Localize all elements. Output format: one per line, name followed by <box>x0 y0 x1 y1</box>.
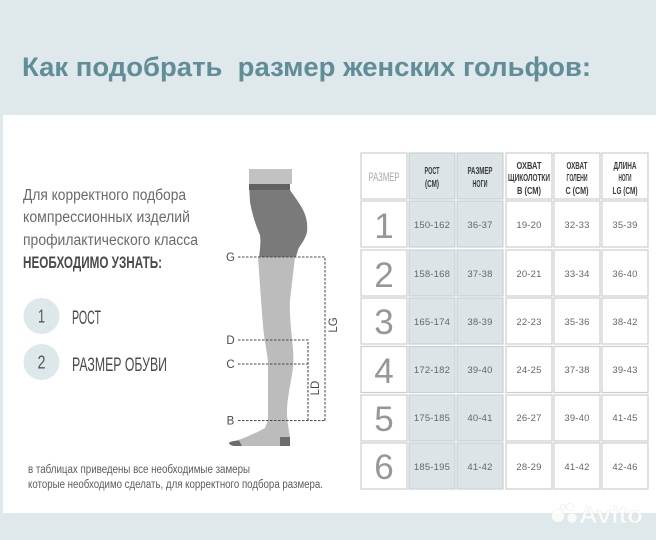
waist band dark stripe <box>249 184 290 190</box>
row: size 4 <box>361 346 648 392</box>
row: size 4: 39-43 <box>612 365 638 376</box>
row: size 1: 35-39 <box>612 220 638 231</box>
header row: (СМ) <box>425 179 439 190</box>
row: size 4: 4 <box>374 352 394 391</box>
list item: height: 1 <box>38 306 45 326</box>
leg diagram <box>226 169 340 446</box>
row: size 2 <box>361 250 648 296</box>
header row: ДЛИНА <box>614 161 636 172</box>
row: size 6: 42-46 <box>612 462 638 473</box>
header row: C (СМ) <box>566 186 588 197</box>
row: size 6: 185-195 <box>414 462 450 473</box>
intro text block: НЕОБХОДИМО УЗНАТЬ: <box>23 253 162 272</box>
measure lines <box>238 257 325 420</box>
row: size 5: 40-41 <box>467 413 493 424</box>
list item: height <box>24 298 101 334</box>
header row: B (СМ) <box>517 186 541 197</box>
heel <box>280 437 290 446</box>
toe <box>229 440 242 446</box>
row: size 1 <box>361 201 648 247</box>
header row <box>361 153 648 199</box>
row: size 2: 20-21 <box>516 269 542 280</box>
header row: НОГИ <box>472 179 488 190</box>
row: size 5: 175-185 <box>414 413 450 424</box>
row: size 6: 41-42 <box>564 462 590 473</box>
labels: G <box>226 252 235 264</box>
footnote <box>28 464 323 491</box>
row: size 3: 38-42 <box>612 317 638 328</box>
row: size 6: 28-29 <box>516 462 542 473</box>
row: size 5: 41-45 <box>612 413 638 424</box>
row: size 2: 37-38 <box>467 269 493 280</box>
header row: РОСТ <box>424 166 440 177</box>
header row: ОХВАТ <box>516 161 542 172</box>
row: size 1: 1 <box>374 207 394 246</box>
row: size 4: 37-38 <box>564 365 590 376</box>
title: Как подобрать размер женских гольфов: <box>22 52 591 82</box>
footnote: которые необходимо сделать, для корректного подбора размера. <box>28 479 323 491</box>
header row: РАЗМЕР <box>468 166 493 177</box>
list item: shoe size <box>24 344 167 380</box>
row: size 5: 26-27 <box>516 413 542 424</box>
row: size 3: 22-23 <box>516 317 542 328</box>
intro text block <box>23 187 198 272</box>
row: size 3 <box>361 298 648 344</box>
intro text block: компрессионных изделий <box>23 209 190 226</box>
row: size 6 <box>361 443 648 489</box>
stocking waistband <box>249 169 292 184</box>
labels <box>226 252 340 428</box>
list item: height: РОСТ <box>72 308 101 329</box>
row: size 4: 39-40 <box>467 365 493 376</box>
row: size 5: 5 <box>374 400 394 439</box>
panel: white content area <box>3 115 656 513</box>
size table <box>361 153 648 489</box>
header row: РАЗМЕР <box>368 170 400 184</box>
header row: ГОЛЕНИ <box>566 173 588 184</box>
row: size 3: 38-39 <box>467 317 493 328</box>
row: size 2: 158-168 <box>414 269 450 280</box>
labels: C <box>226 359 235 371</box>
list item: shoe size: 2 <box>38 352 46 372</box>
row: size 1: 32-33 <box>564 220 590 231</box>
list item: shoe size: РАЗМЕР ОБУВИ <box>72 355 167 376</box>
row: size 5 <box>361 395 648 441</box>
row: size 1: 19-20 <box>516 220 542 231</box>
labels: LD <box>310 381 322 395</box>
row: size 2: 36-40 <box>612 269 638 280</box>
labels: B <box>227 416 235 428</box>
header row: ЩИКОЛОТКИ <box>508 173 550 184</box>
intro text block: Для корректного подбора <box>23 187 186 204</box>
row: size 5: 39-40 <box>564 413 590 424</box>
intro text block: профилактического класса <box>23 232 198 249</box>
row: size 1: 150-162 <box>414 220 450 231</box>
watermark: Avito: Avito <box>579 502 643 529</box>
row: size 3: 35-36 <box>564 317 590 328</box>
row: size 4: 172-182 <box>414 365 450 376</box>
leg <box>231 257 295 446</box>
row: size 2: 2 <box>374 256 394 295</box>
row: size 1: 36-37 <box>467 220 493 231</box>
labels: LG <box>328 317 340 333</box>
header row: LG (СМ) <box>612 186 638 197</box>
row: size 6: 6 <box>374 448 394 487</box>
row: size 4: 24-25 <box>516 365 542 376</box>
row: size 2: 33-34 <box>564 269 590 280</box>
shorts <box>249 184 307 257</box>
row: size 3: 165-174 <box>414 317 450 328</box>
labels: D <box>226 335 235 347</box>
watermark: Avito <box>552 502 643 529</box>
row: size 6: 41-42 <box>467 462 493 473</box>
footnote: в таблицах приведены все необходимые замеры <box>28 464 250 476</box>
header row: ОХВАТ <box>566 161 588 172</box>
header row: НОГИ <box>618 173 632 184</box>
row: size 3: 3 <box>374 303 394 342</box>
